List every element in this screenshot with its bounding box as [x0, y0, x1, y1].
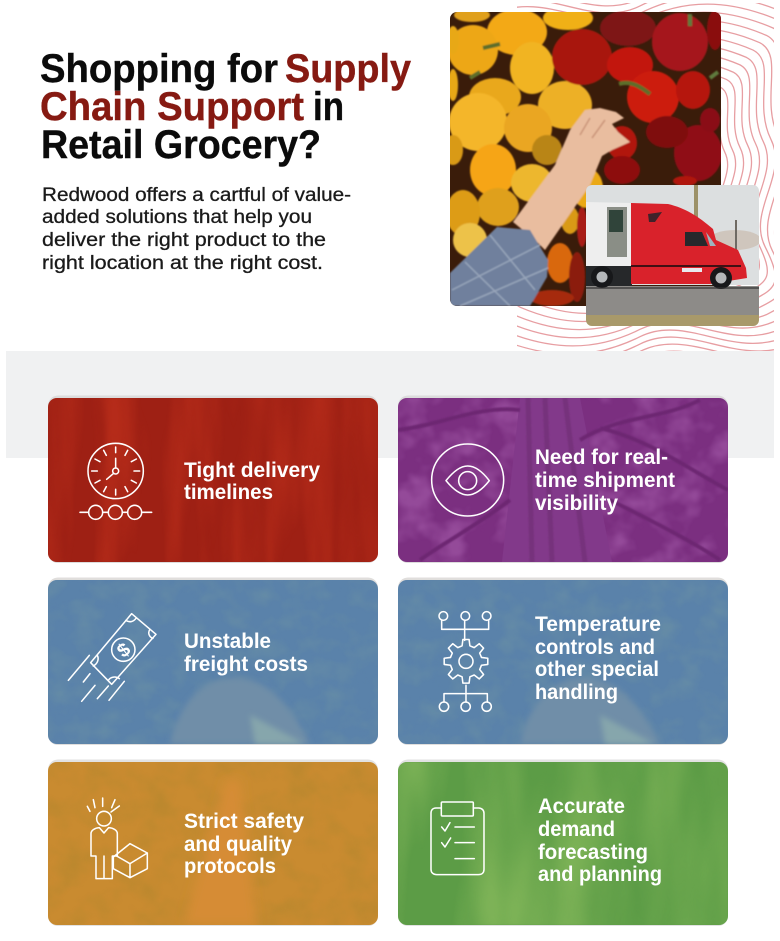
label: [184, 459, 320, 504]
icon: clock and conveyor: [80, 443, 152, 519]
card: temperature controls: [398, 578, 728, 745]
label: Need for real-: [535, 446, 668, 469]
label: [538, 795, 662, 886]
card: demand forecasting: [398, 760, 728, 926]
shirt sleeve: [450, 227, 548, 306]
icon: eye in circle: [432, 444, 504, 516]
card: real-time shipment visibility: [398, 396, 728, 563]
dollar sign: $: [114, 639, 135, 662]
title: Shopping for: [40, 47, 278, 91]
label: handling: [535, 681, 618, 704]
card: tight delivery timelines: [48, 396, 378, 563]
intro text: added solutions that help you: [42, 207, 312, 228]
intro text: [42, 185, 351, 274]
intro text: Redwood offers a cartful of value-: [42, 185, 351, 206]
card background texture purple tree: [398, 398, 728, 562]
label: [184, 630, 308, 676]
gray background band: [6, 351, 774, 458]
icon: checklist clipboard: [431, 802, 484, 875]
label: freight costs: [184, 653, 308, 676]
card background texture green: [398, 762, 728, 925]
label: protocols: [184, 855, 276, 878]
card background texture blue forest: [48, 580, 378, 744]
label: demand: [538, 818, 615, 841]
arm and hand: [513, 108, 630, 250]
title: Supply: [285, 47, 412, 91]
card background texture red: [48, 398, 378, 562]
photo: red truck: [586, 185, 761, 326]
title: [40, 47, 412, 167]
title: Chain Support: [40, 85, 304, 129]
label: [535, 613, 661, 704]
label: [535, 446, 675, 515]
card background texture orange: [48, 762, 378, 925]
label: Accurate: [538, 795, 625, 818]
label: Strict safety: [184, 810, 304, 833]
card: strict safety protocols: [48, 760, 378, 926]
icon: gear network: [439, 612, 491, 711]
title: Retail Grocery?: [41, 123, 321, 167]
label: Unstable: [184, 630, 271, 653]
wavy contour line pattern: [517, 3, 774, 351]
icon: flying banknote: [68, 614, 156, 701]
photo: hand picking bell peppers: [443, 6, 723, 306]
card: unstable freight costs: [48, 578, 378, 745]
label: and planning: [538, 863, 662, 886]
label: other special: [535, 658, 659, 681]
label: time shipment: [535, 469, 675, 492]
intro text: right location at the right cost.: [42, 253, 323, 274]
title: in: [313, 85, 344, 129]
icon: worker with box: [87, 798, 147, 879]
card background texture blue forest: [398, 580, 728, 744]
label: timelines: [184, 481, 273, 504]
label: forecasting: [538, 841, 648, 864]
label: and quality: [184, 833, 292, 856]
intro text: deliver the right product to the: [42, 230, 326, 251]
label: [184, 810, 304, 878]
label: Tight delivery: [184, 459, 320, 482]
label: Temperature: [535, 613, 661, 636]
label: controls and: [535, 636, 655, 659]
label: visibility: [535, 492, 618, 515]
